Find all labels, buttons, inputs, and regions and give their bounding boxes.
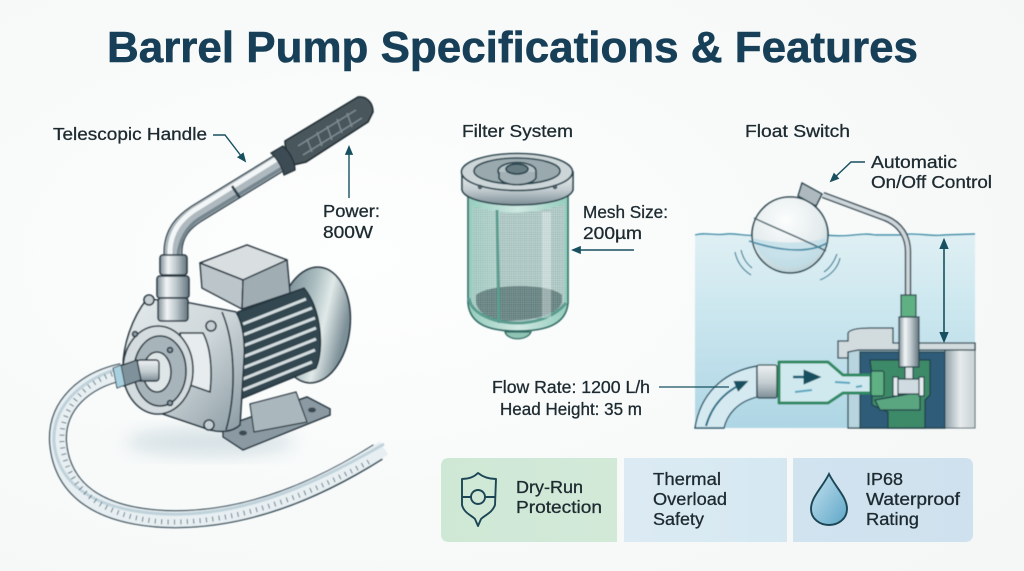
label: automatic on/off control: Automatic — [871, 152, 957, 172]
title: Barrel Pump Specifications & Features — [107, 23, 918, 72]
label: power: Power: — [323, 201, 380, 221]
illustration: barrel pump — [54, 97, 384, 522]
motor junction box — [200, 245, 290, 309]
label: mesh size — [573, 202, 668, 250]
pump head housing — [123, 295, 244, 431]
label: power — [323, 147, 380, 242]
handle collar — [271, 146, 295, 175]
illustration: float switch — [695, 183, 975, 428]
card: thermal overload safety: Overload — [653, 489, 727, 509]
label: power: 800W — [323, 222, 374, 242]
card: ip68 waterproof rating: Rating — [866, 509, 919, 529]
label: telescopic handle: Telescopic Handle — [53, 124, 207, 144]
label: flow rate and head height: Head Height: 35 m — [500, 399, 642, 419]
inlet hose — [695, 366, 757, 428]
filter bottom tip — [505, 332, 531, 339]
pump base plate — [223, 392, 330, 450]
card: thermal overload safety: Thermal — [653, 469, 721, 489]
filter mesh screen — [499, 204, 564, 322]
label: flow rate and head height: Flow Rate: 1200 L/h — [492, 377, 650, 397]
label: automatic on/off control — [831, 152, 992, 192]
card: thermal overload safety: Safety — [653, 509, 704, 529]
label: flow rate and head height — [492, 377, 729, 419]
green inline body — [779, 362, 884, 403]
label: filter system: Filter System — [462, 121, 573, 141]
card: dry-run protection: Protection — [516, 497, 602, 517]
label: float switch: Float Switch — [745, 121, 850, 141]
card: ip68 waterproof rating: IP68 — [866, 469, 903, 489]
card: dry-run protection — [441, 458, 617, 542]
label: mesh size: 200µm — [583, 223, 642, 243]
float ball — [735, 197, 840, 280]
tank wall and housing — [838, 328, 975, 428]
vertical neck fittings — [157, 255, 189, 321]
illustration: filter — [462, 154, 573, 339]
handle grip — [285, 97, 373, 165]
handle tube — [170, 157, 287, 260]
float rod — [823, 195, 908, 295]
card: ip68 waterproof rating — [793, 458, 973, 542]
filter top ring — [462, 154, 573, 205]
filter body — [468, 196, 568, 331]
icon: shield — [462, 473, 496, 526]
pump outlet and hose nut — [113, 360, 159, 388]
label: automatic on/off control: On/Off Control — [871, 172, 992, 192]
label: mesh size: Mesh Size: — [583, 202, 668, 222]
arrow: water level — [943, 240, 945, 341]
pipe nut — [757, 365, 777, 398]
card: dry-run protection: Dry-Run — [516, 477, 583, 497]
card: thermal overload safety — [624, 458, 787, 542]
water tank — [695, 234, 975, 428]
motor fan cover — [272, 264, 356, 386]
card: ip68 waterproof rating: Waterproof — [866, 489, 960, 509]
motor finned body — [238, 288, 320, 400]
pump ground shadow — [125, 428, 295, 456]
suction hose — [54, 368, 384, 522]
label: telescopic handle — [53, 124, 245, 161]
filter bottom mesh — [476, 286, 562, 321]
icon: water drop — [811, 474, 847, 525]
float cap — [798, 183, 822, 206]
float stem — [893, 295, 924, 396]
